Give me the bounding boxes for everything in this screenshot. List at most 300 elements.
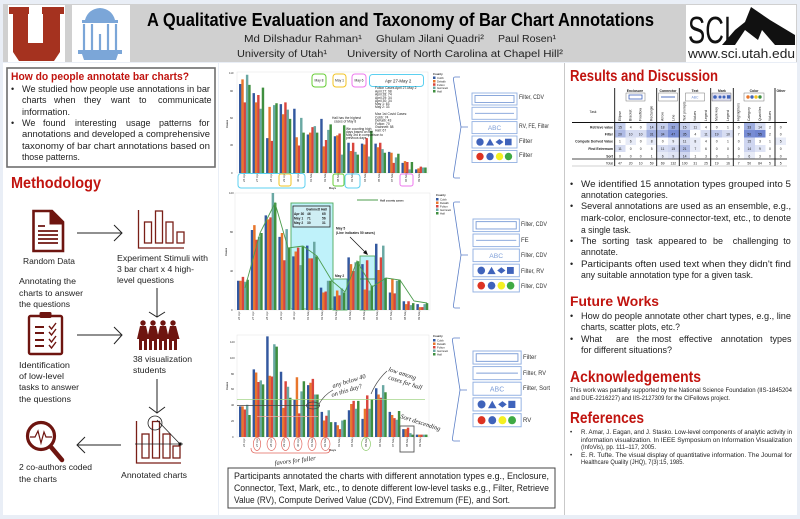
handwritten notes chart 3: favors for fuller: [274, 455, 317, 467]
text: acknowledgements: This work was partially supported by the National Science Foundation (IIS-1845204: [570, 387, 792, 394]
table values: 14: [758, 126, 762, 130]
line legend: hall county cases: Hall county cases: [380, 198, 404, 202]
icon: random data document: [34, 211, 63, 251]
legend chart 2: Gwinnett: [440, 208, 451, 212]
table values: 9: [759, 147, 761, 151]
table values: 0: [769, 154, 771, 158]
text: results bullets: appeared: [658, 236, 696, 246]
text: acknowledgements: and DUE-2216227) and IIS-2127309 for the CIFellows project.: [570, 395, 730, 402]
x axis labels chart 2: 06 May: [375, 310, 379, 320]
brace chart 3: [452, 338, 467, 441]
arrow: stimuli to students: [149, 288, 165, 317]
table values: 7: [694, 147, 696, 151]
arrow: students to annotated charts: [149, 379, 165, 413]
table row labels: Find Extremum: [588, 147, 613, 151]
chart 3: bar chart with handwritten annotations: [225, 334, 555, 508]
text: future works bullets: charts, scatter plots, etc.?: [581, 322, 680, 332]
table values: 9: [672, 140, 674, 144]
x axis labels chart 3: 03 May: [337, 437, 341, 447]
text: future works bullets: •: [570, 334, 573, 344]
table values: 47: [618, 162, 622, 166]
table column headers: Bracket: [628, 109, 632, 121]
table values: 19: [715, 162, 719, 166]
taxonomy swatches chart 1: [472, 93, 517, 162]
text: results bullets: sorting: [602, 236, 629, 246]
text labels: dates chart 1: [312, 74, 424, 87]
table values: 7: [738, 132, 740, 136]
table values: 1: [619, 140, 621, 144]
table values: 1: [727, 140, 729, 144]
table values: 7: [738, 162, 740, 166]
table values: 6: [630, 140, 632, 144]
authors: Paul Rosen¹: [498, 34, 557, 45]
table values: 9: [672, 154, 674, 158]
text labels: dates chart 1: May 1: [335, 78, 344, 82]
table values: 20: [618, 132, 622, 136]
task labels chart 2: Filter, RV: [521, 269, 544, 275]
text: future works bullets: are: [616, 334, 629, 344]
task labels chart 3: [523, 355, 550, 424]
chart 1: bar chart with enclosures and text: [225, 71, 549, 190]
table values: 20: [629, 162, 633, 166]
table values: 0: [716, 126, 718, 130]
task labels chart 2: FE: [521, 238, 529, 244]
table values: 8: [651, 140, 653, 144]
title: A Qualitative Evaluation and Taxonomy of Bar Chart Annotations: [147, 10, 654, 30]
callout: how do people annotate: •: [11, 84, 14, 94]
note: fulton and max cases: Hall: 67: [375, 128, 386, 132]
callout: caption: [228, 468, 555, 508]
table values: 31: [693, 162, 697, 166]
table column headers: [590, 101, 772, 121]
x axis labels chart 1: 04 May: [363, 172, 367, 182]
x axis labels chart 1: 30 Apr: [296, 173, 300, 182]
table category glyphs: ABC: [692, 96, 699, 100]
note: fulton and max cases: Fulton: 70: [375, 122, 390, 126]
taxonomy swatches chart 3: [473, 351, 521, 427]
text: experiment stimuli: [117, 253, 208, 285]
table rules: [572, 88, 787, 166]
legend chart 2: [436, 193, 451, 216]
x axis labels chart 2: 26 Apr: [237, 311, 241, 320]
y axis labels chart 3: 120: [230, 340, 235, 344]
table values: 0: [640, 140, 642, 144]
logo: University of Utah: [8, 5, 65, 62]
text labels: dates chart 1: Apr 27-May 2: [385, 78, 412, 84]
panel: right column: [564, 63, 797, 515]
table values: 0: [780, 154, 782, 158]
text: references: •: [570, 452, 572, 459]
taxonomy swatches chart 1: ABC: [488, 125, 501, 132]
y axis labels chart 1: 90: [230, 89, 234, 93]
text: results bullets: mark-color, enclosure-connector-text, etc., to denote: [581, 213, 791, 223]
text labels: dates chart 1: May 6: [354, 78, 364, 82]
text: results bullets: be: [713, 236, 723, 246]
x axis labels chart 2: 28 Apr: [265, 311, 269, 320]
icon: students group: [137, 320, 180, 350]
text: co-authors coded: [19, 462, 92, 484]
icon: magnifier with pulse: [28, 422, 62, 460]
x axis labels chart 1: 07 May: [390, 172, 394, 182]
table values: 21: [683, 147, 687, 151]
text: results bullets: annotation categories.: [581, 190, 668, 200]
table values: 2: [769, 126, 771, 130]
text: references: •: [570, 429, 572, 436]
table column headers: Ellipse: [618, 111, 622, 121]
table values: 5: [780, 140, 782, 144]
arrow: data to stimuli: [77, 225, 122, 241]
text: annotating the charts: charts to answer: [19, 288, 83, 298]
table values: 1: [727, 154, 729, 158]
note: fulton and max cases: Gwinnett: 58: [375, 125, 394, 129]
table annotation chart 2: 65: [322, 212, 326, 216]
reference line at may 5: [360, 278, 375, 280]
table values: 11: [661, 147, 665, 151]
note: hall highest: May 3rd in comparison to: [346, 133, 383, 137]
text: future works bullets: for different situations?: [581, 345, 672, 355]
taxonomy swatches chart 3: ABC: [490, 386, 504, 393]
x axis labels chart 3: 30 Apr: [296, 438, 300, 447]
chart 2: bar chart with enclosures and line: [224, 191, 547, 320]
table column headers: Text prompts: [682, 101, 686, 121]
x axis labels chart 1: 26 Apr: [242, 173, 246, 182]
table values: 0: [727, 147, 729, 151]
text: future works bullets: effective: [679, 334, 712, 344]
table category headers: [627, 89, 786, 93]
table annotation chart 2: May 2: [294, 221, 303, 225]
y axis labels chart 3: 60: [231, 387, 235, 391]
y axis labels chart 1: 60: [230, 116, 234, 120]
x axis labels chart 1: 29 Apr: [282, 173, 286, 182]
table annotation chart 2: Hall: [321, 208, 327, 212]
y axis labels chart 2: 40: [230, 269, 234, 273]
text: experiment stimuli: Experiment Stimuli with: [117, 253, 208, 263]
table values: 4: [694, 132, 696, 136]
note: fulton and max cases: April 28: 74: [375, 93, 392, 97]
table column headers: Values: [693, 111, 697, 121]
note: fulton and max cases: Cobb: 74: [375, 116, 389, 120]
table category headers: Mark: [718, 89, 726, 93]
y axis labels chart 3: Cases: [225, 381, 229, 390]
x axis labels chart 2: 04 May: [348, 310, 352, 320]
callout: how do people annotate: taxonomy of bar chart annotations based on: [22, 141, 210, 151]
table values: 34: [661, 132, 665, 136]
y axis labels chart 2: 80: [230, 230, 234, 234]
x axis labels chart 2: 01 May: [306, 310, 310, 320]
task labels chart 3: Filter, RV: [523, 371, 546, 377]
table values: 50: [747, 132, 751, 136]
note: fulton and max cases: May 2: 33: [375, 105, 390, 109]
task labels chart 1: RV, FE, Filter: [519, 124, 549, 130]
y axis labels chart 1: 30: [230, 143, 234, 147]
text: 38 visualization students: students: [133, 365, 166, 375]
legend chart 1: Gwinnett: [437, 86, 448, 90]
x axis labels chart 3: 09 May: [418, 437, 422, 447]
legend chart 1: County: [433, 72, 443, 76]
taxonomy swatches chart 2: [473, 219, 519, 292]
table values: 10: [726, 132, 730, 136]
handwritten notes chart 3: Sort descending: [399, 413, 442, 433]
table values: 35: [683, 132, 687, 136]
table values: 0: [738, 126, 740, 130]
note: fulton and max cases: April 30: 34: [375, 99, 392, 103]
table values: 25: [704, 162, 708, 166]
y axis labels chart 1: [225, 71, 234, 175]
table values: 0: [780, 147, 782, 151]
note: hall highest: days based on the: [346, 130, 373, 134]
text: future works bullets: [570, 311, 792, 355]
x axis labels chart 3: 02 May: [323, 437, 327, 447]
table values: 14: [683, 154, 687, 158]
table values: 15: [671, 147, 675, 151]
arrow: annotated charts to coders: [77, 437, 121, 453]
table values: 8: [694, 140, 696, 144]
table column headers: Mark-key: [714, 107, 718, 121]
x axis labels chart 3: 27 Apr: [255, 438, 259, 447]
text: future works bullets: •: [570, 311, 573, 321]
x axis labels chart 2: 09 May: [417, 310, 421, 320]
x axis labels chart 2: 02 May: [320, 310, 324, 320]
table values: 4: [705, 140, 707, 144]
callout: how do people annotate: How do people annotate bar charts?: [11, 71, 189, 83]
x axis labels chart 3: 06 May: [378, 437, 382, 447]
callout: how do people annotate: •: [11, 118, 14, 128]
brace chart 1: [453, 77, 468, 178]
legend chart 2: Fulton: [440, 204, 448, 208]
callout: how do people annotate: those patterns.: [22, 152, 80, 162]
table cell shading: [615, 123, 786, 159]
y axis labels chart 3: 80: [231, 372, 235, 376]
table values: 6: [748, 154, 750, 158]
text: 38 visualization students: [133, 354, 192, 375]
text: results bullets: •: [570, 201, 573, 211]
table values: 10: [639, 162, 643, 166]
table row labels: Retrieve value: [590, 126, 613, 130]
note: fulton and max cases: Fulton Cases April 27-May 2: [375, 86, 417, 90]
table values: 0: [619, 154, 621, 158]
table values: 0: [630, 154, 632, 158]
cyan enclosures chart 2: [291, 203, 375, 310]
y axis labels chart 1: 110: [229, 71, 234, 75]
x axis labels chart 3: 29 Apr: [282, 438, 286, 447]
callout: may 5 with arrow: May 5: [336, 226, 345, 230]
panel: left column: [3, 63, 218, 515]
table values: 100: [682, 162, 688, 166]
text: future works bullets: most: [652, 334, 672, 344]
taxonomy swatches chart 2: ABC: [489, 253, 503, 260]
table column headers: Rectangle: [650, 106, 654, 121]
text: references: [570, 429, 793, 466]
table values: 1: [694, 154, 696, 158]
table values: 15: [747, 140, 751, 144]
table values: [618, 126, 782, 166]
icon: clipboard: [29, 312, 62, 354]
table values: 0: [780, 126, 782, 130]
y axis labels chart 2: Cases: [224, 247, 228, 256]
x axis labels chart 3: [242, 437, 422, 452]
table values: 0: [780, 132, 782, 136]
callout: how do people annotate: We: [22, 118, 35, 128]
note: hall highest: We counting high: [346, 127, 372, 131]
table annotation chart 2: [293, 206, 330, 227]
legend chart 3: Gwinnett: [437, 349, 448, 353]
legend chart 3: Hall: [437, 352, 442, 356]
callout: how do people annotate: charts: [22, 95, 47, 105]
bars chart 2: [237, 193, 428, 310]
task labels chart 3: Filter: [523, 355, 536, 361]
table values: 5: [780, 162, 782, 166]
x axis labels chart 1: 06 May: [404, 172, 408, 182]
y axis labels chart 3: 100: [230, 356, 235, 360]
callout: how do people annotate: We studied how people use annotations in bar: [22, 84, 210, 94]
table values: 69: [661, 162, 665, 166]
text labels: dates chart 1: May 8: [314, 78, 324, 82]
table row labels: [575, 126, 614, 166]
x axis labels chart 3: 28 Apr: [269, 438, 273, 447]
affiliations: University of North Carolina at Chapel Hill²: [347, 49, 564, 60]
x axis labels chart 3: 26 Apr: [242, 438, 246, 447]
logo: SCI Institute: [686, 5, 796, 62]
callout: how do people annotate: want: [110, 95, 131, 105]
table values: 55: [758, 132, 762, 136]
logo: SCI Institute: www.sci.utah.edu: [687, 46, 795, 61]
affiliations: University of Utah¹: [237, 49, 328, 60]
table column headers: Category: [747, 107, 751, 121]
table values: 0: [769, 147, 771, 151]
table values: 84: [758, 162, 762, 166]
task labels chart 2: Filter, CDV: [521, 222, 547, 228]
text: results bullets: We identified 15 annotation types grouped into 5: [581, 179, 791, 189]
table values: 50: [747, 162, 751, 166]
text: results bullets: •: [570, 259, 573, 269]
icon: bar chart stimuli: [138, 210, 184, 248]
text: identification of tasks: the questions: [19, 394, 71, 404]
note: fulton and max cases: Max 1st Covid Cases:: [375, 112, 407, 116]
x axis labels chart 3: 08 May: [405, 437, 409, 447]
text: experiment stimuli: level questions: [117, 275, 174, 285]
table annotation chart 2: 30: [307, 221, 311, 225]
bars chart 1: [239, 75, 427, 173]
x axis labels chart 1: 01 May: [309, 172, 313, 182]
text: results bullets: Several annotations are used as an ensemble, e.g.,: [581, 201, 791, 211]
handwritten notes chart 3: any below 40: [332, 373, 367, 390]
task labels chart 1: Filter: [519, 139, 532, 145]
text: future works bullets: types: [770, 334, 792, 344]
enclosures on axis chart 1: [238, 174, 413, 188]
table values: 0: [716, 147, 718, 151]
authors: Md Dilshadur Rahman¹: [244, 34, 363, 45]
text: identification of tasks: tasks to answer: [19, 382, 79, 392]
table column headers: Legend: [704, 110, 708, 121]
table values: 2: [769, 132, 771, 136]
text: references: Healthcare Quality (JHQ), 7(3):15, 1985.: [581, 459, 684, 466]
table values: 6: [662, 154, 664, 158]
note: fulton and max cases: April 29: 34: [375, 96, 392, 100]
x axis labels chart 1: 28 Apr: [269, 173, 273, 182]
table values: 0: [630, 147, 632, 151]
note: fulton and max cases: [375, 86, 417, 132]
table values: 3: [705, 154, 707, 158]
handwritten notes chart 3: low among: [387, 366, 418, 382]
text: experiment stimuli: 3 bar chart x 4 high-: [117, 264, 194, 274]
y axis labels chart 2: [224, 191, 234, 312]
x axis labels chart 1: [242, 172, 421, 190]
table values: 0: [738, 154, 740, 158]
text: results bullets: The: [581, 236, 597, 246]
table row labels: Compute Derived Value: [575, 140, 613, 144]
text: results bullets: task: [636, 236, 653, 246]
table values: 0: [640, 154, 642, 158]
text: results bullets: to: [783, 236, 791, 246]
text: references: information visualization. In IEEE Symposium on Information Visualization: [581, 437, 793, 444]
line legend: hall county cases: [357, 198, 404, 202]
text: results bullets: any suitable annotation type for a given task.: [581, 270, 753, 280]
affiliations: [237, 49, 564, 60]
note: hall highest: [332, 116, 383, 140]
table values: 132: [670, 162, 676, 166]
x axis labels chart 1: 03 May: [350, 172, 354, 182]
callout: may 5 with arrow: (Line indicates 50 cases): [336, 231, 375, 235]
heading: future works: Future Works: [570, 294, 659, 309]
legend chart 1: Cobb: [437, 76, 444, 80]
table annotation chart 2: 71: [307, 216, 311, 220]
table category headers: Color: [750, 89, 759, 93]
table annotation chart 2: 56: [322, 216, 326, 220]
reference lines chart 3: [237, 400, 425, 416]
text: identification of tasks: Identification: [19, 360, 70, 370]
table category headers: Enclosure: [627, 89, 643, 93]
table values: 11: [694, 126, 697, 130]
table: task by annotation type: [572, 88, 787, 166]
table category glyphs: [626, 93, 764, 101]
text: results bullets: challenging: [733, 236, 778, 246]
text: results bullets: a single task.: [581, 225, 631, 235]
note: hall highest: cases of May 8: [334, 120, 356, 124]
table values: 5: [651, 147, 653, 151]
brace chart 2: [453, 202, 468, 308]
label: may 2: May 2: [335, 274, 344, 278]
handwritten notes chart 3: cases for hall: [387, 374, 423, 392]
callout: how do people annotate: when: [53, 95, 76, 105]
table category headers: Connector: [660, 89, 677, 93]
legend chart 1: Hall: [437, 90, 442, 94]
text: acknowledgements: [570, 387, 792, 402]
table values: 4: [630, 126, 632, 130]
x axis labels chart 1: 27 Apr: [255, 173, 259, 182]
text: co-authors coded: the charts: [19, 474, 57, 484]
note: hall highest: Hall has the highest: [332, 116, 361, 120]
text: results bullets: •: [570, 179, 573, 189]
x axis labels chart 3: Days: [329, 448, 337, 452]
legend chart 3: County: [433, 334, 443, 338]
task labels chart 1: Filter: [519, 153, 532, 159]
callout: how do people annotate: for: [199, 118, 210, 128]
table column headers: Highlighters: [736, 103, 740, 121]
x axis labels chart 1: Days: [329, 186, 337, 190]
text: identification of tasks: of low-level: [19, 371, 64, 381]
y axis labels chart 1: Cases: [225, 119, 229, 128]
logo: SCI Institute: SCI: [688, 10, 731, 52]
y axis labels chart 2: 0: [231, 308, 233, 312]
x axis labels chart 2: 27 Apr: [251, 311, 255, 320]
table column headers: Line: [672, 114, 676, 121]
x axis labels chart 2: [237, 310, 421, 320]
table column headers: Freeflow: [638, 107, 642, 121]
table column headers: Values: [768, 111, 772, 121]
table values: 32: [671, 126, 675, 130]
table category headers: Text: [692, 89, 699, 93]
legend chart 1: Fulton: [437, 83, 445, 87]
